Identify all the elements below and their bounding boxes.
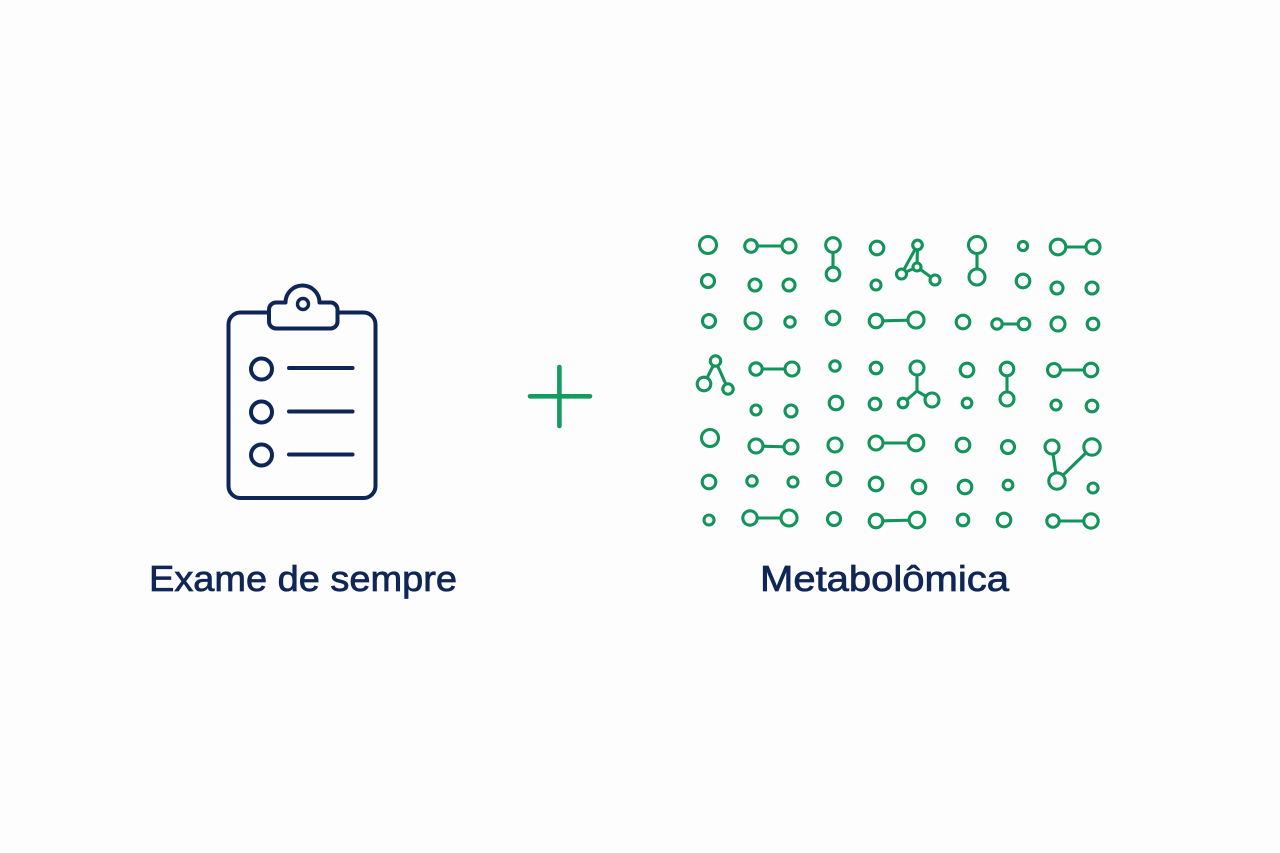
row 6: [702, 430, 1100, 489]
icon: clipboard checklist: [228, 286, 376, 498]
label: Metabolômica: Metabolômica: [760, 558, 1010, 599]
metabolomics molecule grid: [697, 236, 1100, 528]
row 5: [751, 396, 1098, 417]
label: Exame de sempre: Exame de sempre: [149, 558, 457, 599]
row 8: [704, 510, 1098, 528]
row 7: [702, 472, 1098, 494]
clip hole: [298, 298, 308, 310]
row 3: [702, 311, 1099, 331]
row 4: [697, 356, 1098, 408]
row 1: [700, 236, 1100, 285]
icon: plus sign: [530, 367, 590, 426]
clipboard body: [228, 312, 376, 498]
checklist item 1: [251, 358, 352, 380]
clipboard clip: [269, 286, 338, 328]
checklist item 3: [251, 444, 352, 466]
checklist item 2: [251, 402, 352, 422]
row 2: [702, 274, 1098, 294]
